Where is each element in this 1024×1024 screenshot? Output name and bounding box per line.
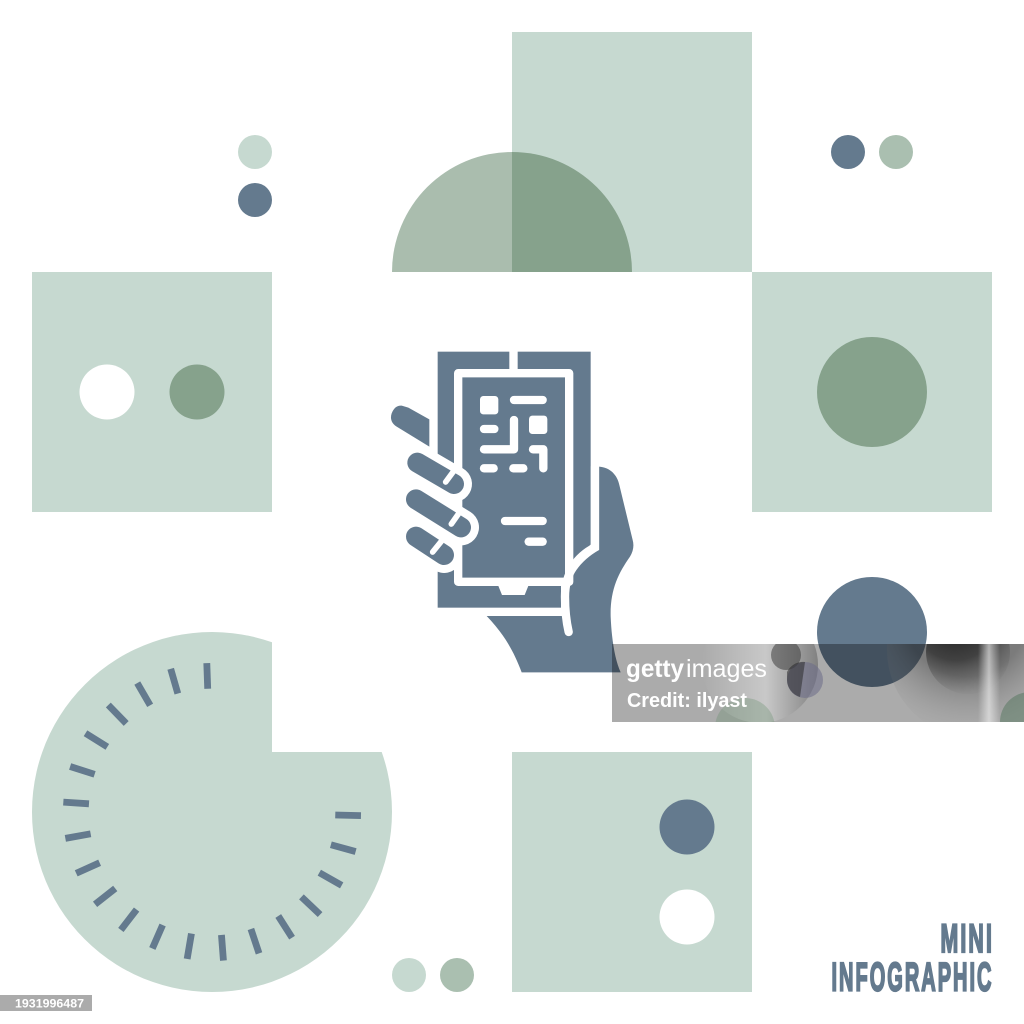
phone back xyxy=(438,350,593,610)
thumb edge xyxy=(565,467,595,632)
semicircle xyxy=(392,152,632,272)
three fingers xyxy=(416,463,461,555)
watermark credit: Credit: ilyast xyxy=(627,690,747,712)
panel: bottom square with two dots xyxy=(512,752,752,992)
image id tag xyxy=(0,995,92,1011)
icon: hand holding phone with QR code xyxy=(391,350,633,672)
watermark band xyxy=(612,644,1024,722)
title xyxy=(832,917,994,1000)
slate circle xyxy=(817,577,927,687)
QR code xyxy=(480,396,547,542)
hand xyxy=(487,467,633,672)
watermark wordmark: getty xyxy=(626,655,684,683)
phone screen xyxy=(458,373,569,582)
index finger xyxy=(391,406,429,447)
dial chart with ticks xyxy=(32,632,392,992)
panel: left square with two dots xyxy=(32,272,272,512)
watermark wordmark: images xyxy=(686,655,767,683)
dots: top right xyxy=(831,135,913,169)
panel: right square with circle xyxy=(752,272,992,512)
watermark wordmark xyxy=(627,659,766,682)
image id tag: 1931996487 xyxy=(15,996,84,1010)
top square panel xyxy=(512,32,752,272)
phone notch xyxy=(497,583,529,595)
dots: top left xyxy=(238,135,272,217)
dots: bottom xyxy=(392,958,474,992)
